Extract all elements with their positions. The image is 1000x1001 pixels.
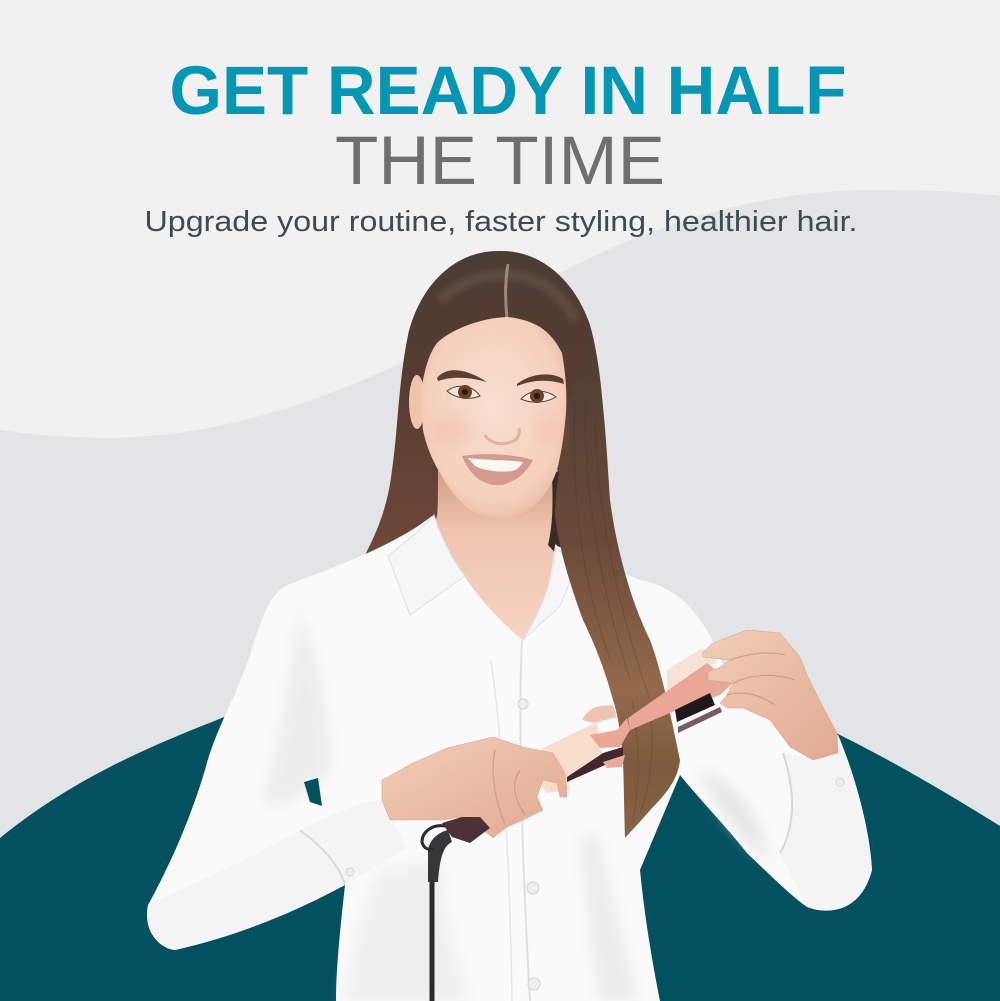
cheek blush bbox=[430, 414, 470, 446]
shirt: gap between arm and torso bbox=[304, 778, 322, 806]
straightener: pivot loop bbox=[582, 705, 617, 723]
shirt: left cuff bbox=[147, 800, 407, 950]
straightener: cream lower barrel bbox=[530, 722, 602, 793]
eye: left bbox=[447, 385, 480, 399]
title: first line: GET READY IN HALF bbox=[170, 52, 846, 129]
straightener: handle grip bbox=[442, 817, 490, 843]
ear bbox=[409, 375, 425, 429]
lips and smile bbox=[462, 454, 533, 485]
face bbox=[422, 317, 566, 518]
eyebrow: left bbox=[437, 370, 487, 382]
collar: right bbox=[523, 545, 574, 640]
hair: back silhouette bbox=[365, 251, 608, 560]
nose bbox=[485, 428, 519, 444]
power cord bbox=[422, 826, 452, 1001]
cheek blush: right bbox=[535, 414, 563, 446]
straightener: lower clip bbox=[603, 755, 625, 768]
straightener: dark strip bbox=[567, 747, 623, 782]
subtitle: Upgrade your routine, faster styling, healthier hair. bbox=[144, 206, 858, 238]
shirt: torso and sleeves bbox=[147, 516, 872, 1001]
woman bbox=[147, 251, 872, 1001]
shirt shading: folds bbox=[262, 610, 330, 804]
hand: right holding straightener bbox=[702, 630, 838, 760]
hair: sheen on crown bbox=[440, 275, 575, 320]
shirt: placket bbox=[520, 640, 530, 1001]
title: second line: THE TIME bbox=[335, 122, 665, 199]
hair: part line bbox=[506, 264, 508, 318]
straightener: cream upper barrel bbox=[667, 648, 717, 690]
eye: right bbox=[521, 389, 556, 403]
straightener: rear parts bbox=[530, 648, 717, 793]
straightener: pink plates bbox=[590, 663, 733, 748]
shirt: right cuff bbox=[780, 735, 872, 911]
hand: left gripping bbox=[382, 737, 567, 838]
neck and chest bbox=[436, 470, 558, 640]
background: teal arc bbox=[0, 660, 1000, 1001]
collar: left bbox=[388, 515, 465, 615]
eyebrow: right bbox=[517, 374, 564, 386]
shirt: buttons bbox=[346, 699, 844, 990]
hair: right strand bbox=[555, 340, 680, 838]
shadow: hair behind neck bbox=[548, 470, 562, 560]
